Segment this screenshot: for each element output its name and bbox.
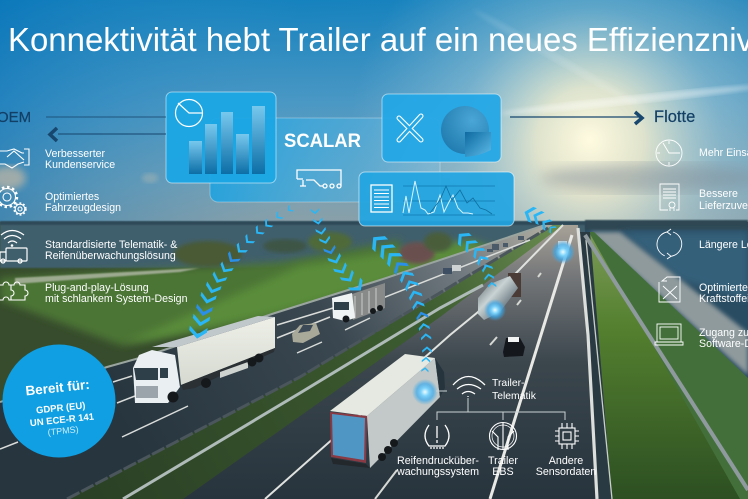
Flotte heading: Flotte	[654, 108, 695, 126]
badge standards: GDPR (EU)	[36, 400, 86, 417]
callout: ready for badge	[2, 344, 116, 458]
icon: cycle arrows	[657, 229, 682, 259]
label: other sensor data: Andere	[549, 455, 583, 467]
bar chart	[189, 106, 265, 174]
background: fields and hills	[0, 221, 600, 499]
icon: trailer axles	[323, 184, 341, 188]
panel: clock and bar chart	[166, 92, 276, 183]
icon: clock	[176, 100, 202, 126]
OEM benefit list	[0, 148, 188, 305]
text: vehicle design: Fahrzeugdesign	[45, 202, 121, 214]
arrow: to Flotte	[510, 112, 642, 124]
line chart	[403, 181, 495, 215]
car: silver	[292, 323, 320, 343]
icon: wifi	[453, 376, 485, 397]
panel: document and line chart	[359, 172, 514, 226]
SCALAR logo: SCALAR	[284, 131, 361, 152]
label: trailer telematics: Telematik	[492, 391, 537, 402]
icon: clock	[656, 140, 682, 166]
text: telematics: Reifenüberwachungslösung	[45, 250, 176, 262]
connector lines	[436, 391, 565, 420]
icon: certificate document	[660, 184, 679, 211]
telematics tree	[396, 376, 596, 478]
car: distant traffic	[487, 236, 524, 252]
badge heading: Bereit für:	[25, 377, 90, 399]
arrows: data flow, tanker to panel	[453, 228, 496, 288]
pie chart	[441, 106, 491, 157]
text: plug and play: mit schlankem System-Design	[45, 293, 188, 305]
text: customer service: Verbesserter	[45, 148, 106, 160]
icon: wrench and screwdriver	[399, 116, 421, 140]
car: pair in distance	[443, 265, 461, 274]
background: sky with sun	[0, 0, 748, 232]
icon: chip sensor	[555, 423, 579, 449]
text: delivery reliability: Bessere	[699, 188, 738, 200]
badge TPMS: (TPMS)	[47, 424, 79, 437]
text: vehicle design: Optimiertes	[45, 191, 99, 203]
text: software data: Zugang zu	[699, 327, 748, 339]
label: other sensor data: Sensordaten	[536, 466, 596, 478]
truck: white semi on far lane	[133, 316, 275, 403]
arrow: from OEM	[46, 116, 166, 118]
icon: puzzle pieces	[0, 282, 28, 300]
icon: trailer outline	[297, 170, 341, 186]
background: far-right carriageway	[585, 220, 748, 499]
truck: distant white	[558, 241, 567, 248]
status nodes on vehicles	[412, 240, 575, 405]
icon: handshake	[0, 149, 29, 168]
tanker truck	[478, 273, 521, 320]
background: main motorway	[0, 225, 748, 499]
icon: fuel canister	[659, 277, 680, 302]
label: trailer telematics: Trailer-	[492, 378, 525, 389]
fleet benefit list	[655, 140, 748, 350]
icon: trailer EBS	[490, 422, 516, 450]
panel: SCALAR centre	[210, 118, 440, 202]
truck: flatbed cargo	[332, 283, 385, 322]
arrows: data flow, distant truck to panel	[522, 205, 557, 234]
badge standards: UN ECE-R 141	[29, 411, 95, 429]
label: trailer EBS: EBS	[492, 466, 514, 478]
label: TPMS: Reifendrucküber-	[397, 455, 479, 467]
car: black on near lane	[503, 337, 525, 357]
label: trailer EBS: Trailer	[488, 455, 518, 467]
icon: laptop	[655, 324, 683, 345]
arrows: data flow, SCALAR to flatbed truck	[311, 208, 367, 295]
icon: wifi truck	[0, 230, 27, 263]
text: telematics: Standardisierte Telematik- &	[45, 239, 177, 251]
panel: tools and pie chart	[382, 94, 501, 162]
label: TPMS: wachungssystem	[396, 466, 479, 478]
icon: gears	[0, 187, 26, 215]
truck: near lane white trailer	[330, 354, 445, 468]
icon: tyre pressure	[425, 425, 449, 448]
text: plug and play: Plug-and-play-Lösung	[45, 282, 149, 294]
text: customer service: Kundenservice	[45, 159, 115, 171]
arrows: data flow, left truck to SCALAR	[188, 205, 294, 340]
arrows: data flow, near trailer to panel	[367, 231, 432, 372]
icon: document	[371, 185, 392, 212]
arrow: to OEM	[50, 128, 166, 141]
